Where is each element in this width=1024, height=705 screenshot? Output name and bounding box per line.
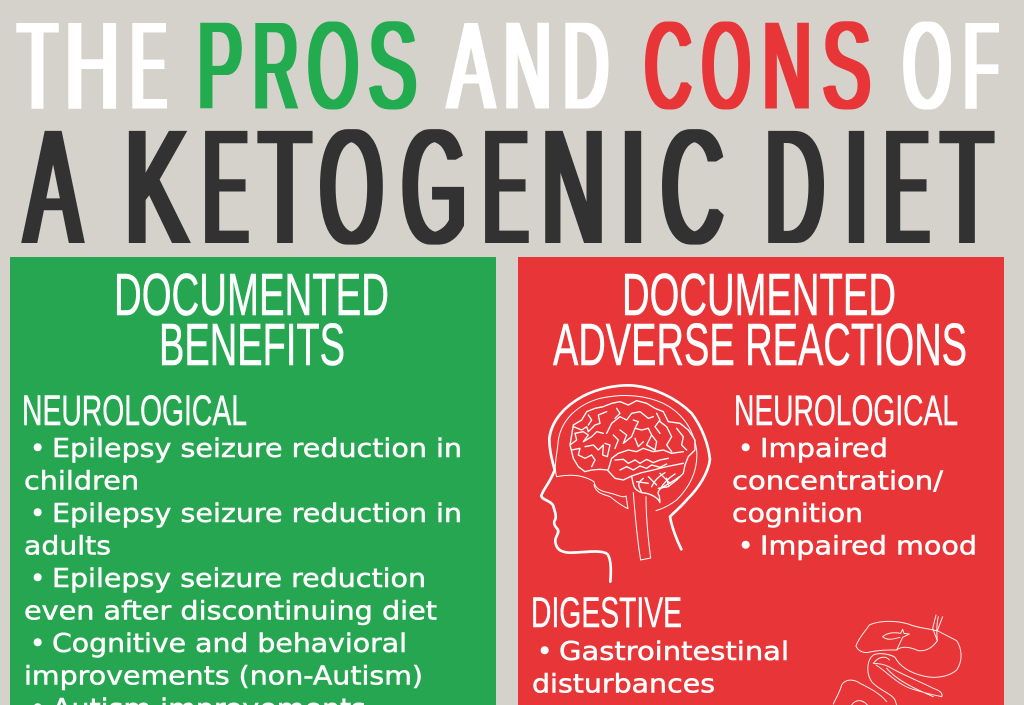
- title line 1: P: [198, 0, 242, 136]
- list: digestive reactions: Gastrointestinal: [559, 637, 789, 667]
- list: neurological reactions: •: [738, 532, 753, 562]
- title line 2: G: [402, 95, 466, 278]
- list: neurological benefits: [24, 434, 462, 705]
- heading: documented benefits: DOCUMENTED: [114, 261, 389, 328]
- title line 2: C: [662, 95, 723, 278]
- heading: documented benefits: [114, 261, 389, 378]
- title line 2: I: [620, 95, 646, 278]
- list: neurological benefits: Epilepsy seizure reduction: [52, 564, 426, 594]
- title line 2: A: [25, 95, 81, 278]
- title line 1: D: [563, 0, 608, 136]
- title line 1: O: [903, 0, 951, 136]
- list: neurological reactions: concentration/: [732, 466, 943, 496]
- list: neurological reactions: Impaired mood: [760, 532, 977, 562]
- title line 1: N: [504, 0, 551, 136]
- list: neurological reactions: Impaired: [760, 434, 888, 464]
- title line 2: I: [846, 95, 868, 278]
- title line 2: E: [204, 95, 248, 278]
- title line 2: E: [885, 95, 929, 278]
- title line 1: A: [448, 0, 494, 136]
- list: neurological benefits: •: [30, 564, 45, 594]
- panel: documented adverse reactions: [518, 257, 1004, 705]
- title line 1: S: [369, 0, 416, 136]
- title line 1: H: [65, 0, 119, 136]
- list: neurological benefits: •: [30, 629, 45, 659]
- list: neurological reactions: [732, 434, 977, 562]
- title line 2: K: [125, 95, 188, 278]
- subheading: neurological benefits: NEUROLOGICAL: [22, 387, 247, 435]
- title line 1: O: [702, 0, 750, 136]
- title line 2: T: [260, 95, 310, 278]
- title line 2: N: [542, 95, 605, 278]
- title line 2: O: [320, 95, 383, 278]
- title line 2: D: [766, 95, 824, 278]
- title line 1: [18, 0, 998, 136]
- list: neurological benefits: •: [30, 499, 45, 529]
- list: neurological benefits: Cognitive and behavioral: [52, 629, 407, 659]
- title line 1: E: [131, 0, 166, 136]
- list: digestive reactions: [532, 637, 789, 700]
- list: neurological benefits: adults: [24, 532, 111, 562]
- title line 2: E: [484, 95, 528, 278]
- list: neurological benefits: even after discontinuing diet: [24, 596, 437, 626]
- list: neurological benefits: children: [24, 466, 139, 496]
- panel: documented benefits: [10, 257, 496, 705]
- subheading: digestive: DIGESTIVE: [531, 589, 682, 637]
- title line 1: T: [18, 0, 57, 136]
- icon: head and brain: [541, 385, 710, 582]
- list: neurological reactions: •: [738, 434, 753, 464]
- heading: documented adverse reactions: [553, 261, 967, 378]
- title line 1: N: [763, 0, 811, 136]
- list: neurological reactions: cognition: [732, 499, 863, 529]
- list: neurological benefits: Epilepsy seizure reduction in: [52, 434, 462, 464]
- heading: documented benefits: BENEFITS: [159, 311, 345, 378]
- title line 1: S: [823, 0, 870, 136]
- list: neurological benefits: •: [30, 434, 45, 464]
- list: neurological benefits: Epilepsy seizure reduction in: [52, 499, 462, 529]
- list: digestive reactions: disturbances: [532, 670, 715, 700]
- icon: digestive organs: [833, 615, 961, 705]
- title line 1: C: [645, 0, 691, 136]
- title line 1: R: [253, 0, 298, 136]
- title line 1: O: [308, 0, 358, 136]
- list: digestive reactions: •: [537, 637, 552, 667]
- title line 2: [25, 95, 992, 278]
- list: neurological benefits: improvements (non-Autism): [24, 662, 423, 692]
